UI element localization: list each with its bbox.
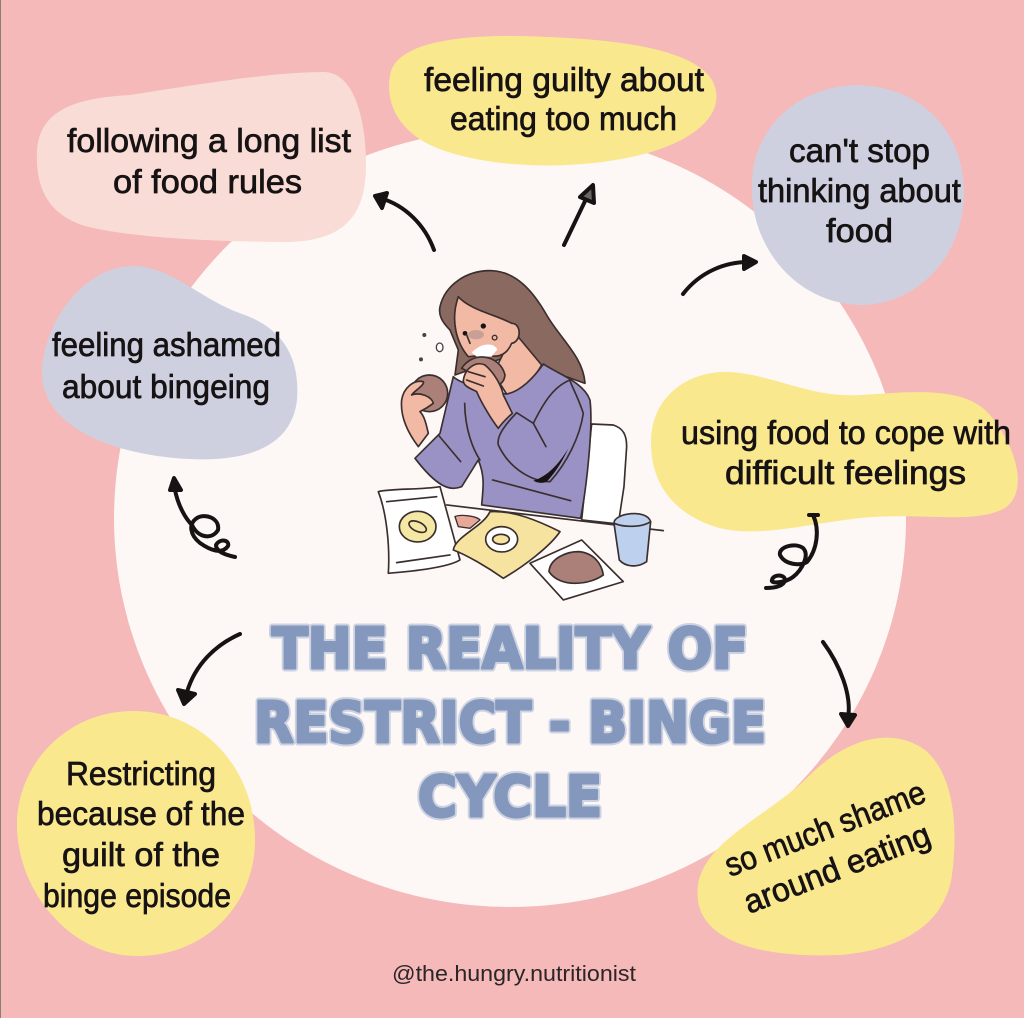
panel: can't stop thinking about food: can't stop [789,132,930,169]
icon: mouth [472,344,497,357]
arrow: from centre to can't stop [683,256,756,294]
panel: can't stop thinking about food [752,85,964,305]
panel: can't stop thinking about food: thinking about [758,172,961,209]
panel: feeling ashamed about bingeing: feeling ashamed [52,326,281,363]
panel: following a long list of food rules [37,72,366,242]
title: the reality of restrict-binge cycle: THE REALITY OF [272,617,748,682]
icon: mouth-hand fingers [467,372,485,386]
panel: following a long list of food rules: of food rules [113,163,302,200]
title: the reality of restrict-binge cycle: THE REALITY OF [272,617,748,682]
icon: table edge [447,505,663,531]
credit handle: @the.hungry.nutritionist [392,961,636,986]
title: the reality of restrict-binge cycle [254,617,766,830]
panel: feeling guilty about eating too much [389,36,716,165]
icon: bun in hand [411,375,448,412]
title: the reality of restrict-binge cycle: RESTRICT - BINGE [254,691,766,756]
icon: face [455,297,519,357]
icon: sweater [415,364,591,518]
panel: so much shame around eating [697,738,955,955]
panel: so much shame around eating: around eating [738,815,935,921]
arrow: from centre to guilty [564,185,594,245]
panel: feeling guilty about eating too much: eating too much [450,100,677,137]
icon: sleeve folds [438,403,571,501]
panel: restricting because of the guilt of the binge episode: Restricting [66,755,216,792]
icon: right arm [498,380,583,482]
icon: bun being bitten [462,357,505,385]
panel: using food to cope with difficult feelings: difficult feelings [725,454,966,491]
illustration: woman eating [378,271,663,600]
arrow: from centre to food rules [375,193,434,250]
icon: crumbs [419,333,443,361]
icon: yellow snack bag [453,511,560,578]
icon: eyes and nose [463,323,497,343]
icon: bun wrapper [530,540,623,600]
icon: white snack bag [378,487,460,573]
panel: using food to cope with difficult feelings: using food to cope with [681,414,1011,451]
panel: feeling ashamed about bingeing: about bingeing [62,368,270,405]
panel: restricting because of the guilt of the binge episode: because of the [37,795,245,832]
icon: hand holding bun [401,381,433,447]
panel: so much shame around eating: so much shame [719,773,930,884]
icon: hair back [440,271,585,383]
panel: using food to cope with difficult feelings [651,372,1018,531]
title: the reality of restrict-binge cycle: CYCLE [418,765,602,830]
icon: chair [582,424,627,524]
icon: glass [614,514,651,566]
title: the reality of restrict-binge cycle: RESTRICT - BINGE [254,691,766,756]
arrow: to restricting [178,634,240,704]
panel: can't stop thinking about food: food [826,212,893,249]
title: the reality of restrict-binge cycle: CYCLE [418,765,602,830]
arrow: to so much shame [823,642,855,726]
panel: restricting because of the guilt of the binge episode: binge episode [43,877,231,914]
panel: restricting because of the guilt of the binge episode: guilt of the [62,836,220,873]
icon: neck and chest [493,335,542,394]
panel: feeling ashamed about bingeing [42,266,297,459]
icon: hand at mouth [463,364,512,428]
central cream circle [114,129,906,907]
panel: feeling guilty about eating too much: feeling guilty about [424,61,704,98]
arrow: curly from coping to shame [766,515,818,588]
panel: following a long list of food rules: following a long list [67,122,351,159]
arrow: curly to feeling ashamed [170,478,235,557]
panel: restricting because of the guilt of the binge episode [17,711,255,956]
